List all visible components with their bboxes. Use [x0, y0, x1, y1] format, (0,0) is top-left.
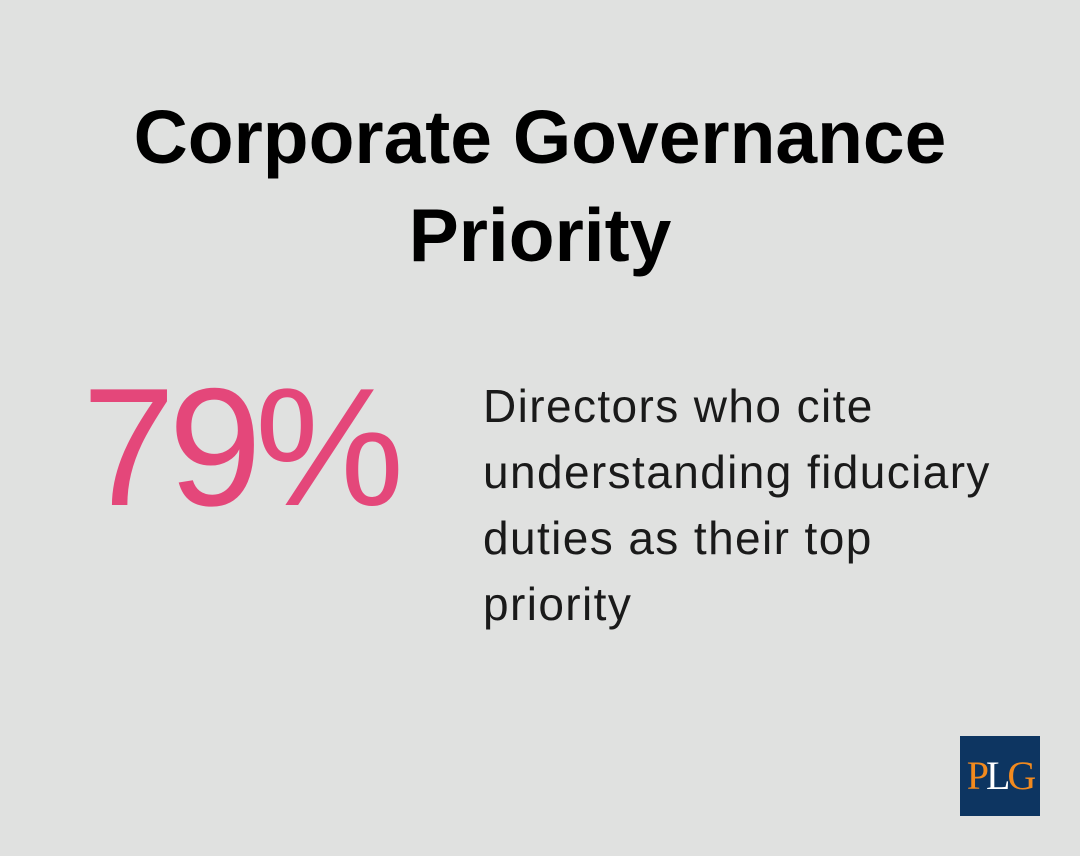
title	[134, 95, 946, 277]
title: Priority	[409, 193, 671, 277]
logo: PLG	[960, 736, 1040, 816]
logo: PLG: PLG	[967, 753, 1033, 798]
description text: Directors who cite understanding fiduciary duties as their top priority	[483, 380, 991, 630]
title: Corporate Governance	[134, 95, 946, 179]
big statistic: 79%	[82, 353, 397, 541]
